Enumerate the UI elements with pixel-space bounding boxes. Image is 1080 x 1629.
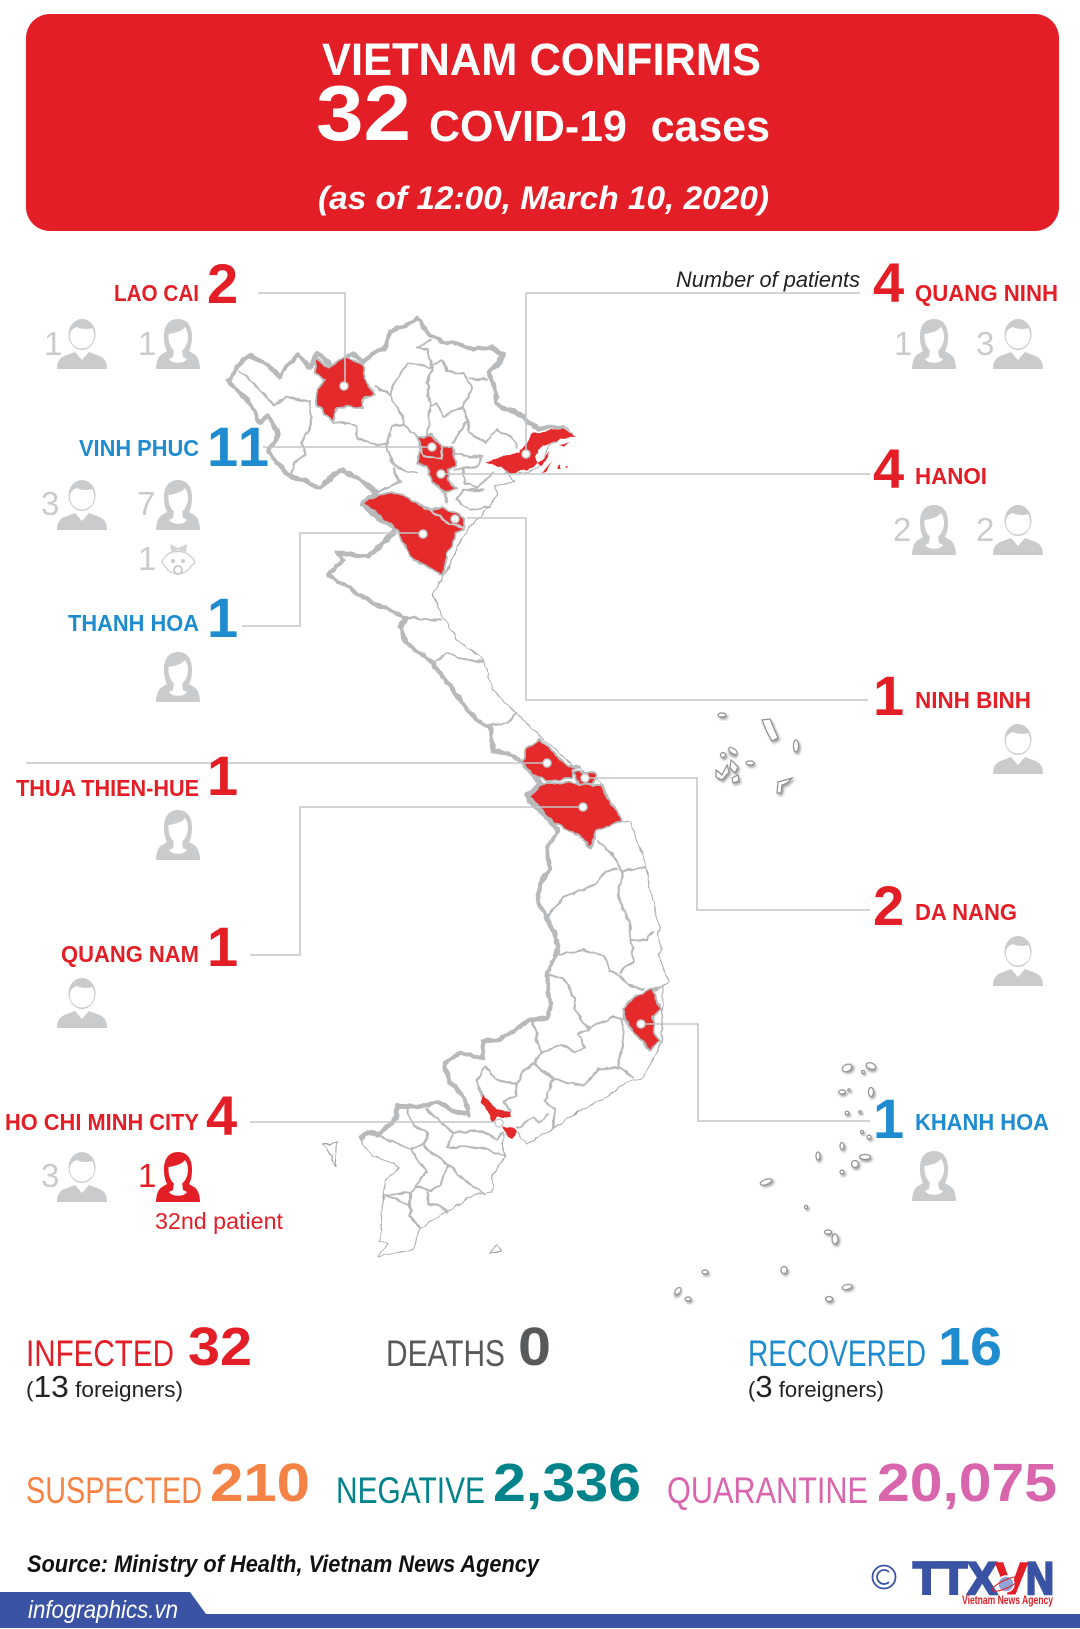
map of Vietnam xyxy=(228,318,669,1257)
islands: Truong Sa xyxy=(674,1061,877,1302)
date line: (as of 12:00, March 10, 2020) xyxy=(318,180,769,216)
location: Lao Cai: LAO CAI xyxy=(114,280,199,306)
site name: infographics.vn xyxy=(28,1596,178,1624)
location: Da Nang: DA NANG xyxy=(915,899,1017,925)
stat: recovered: (3 foreigners) xyxy=(748,1369,884,1404)
location: Ho Chi Minh City: HO CHI MINH CITY xyxy=(5,1109,199,1135)
logo: TTXVN xyxy=(872,1553,1054,1607)
location: Ho Chi Minh City: 3 xyxy=(41,1157,59,1194)
stat: quarantine xyxy=(667,1453,1057,1513)
land border xyxy=(228,318,563,1138)
location: Thanh Hoa: THANH HOA xyxy=(68,610,199,636)
location: Quang Nam: QUANG NAM xyxy=(61,941,199,967)
stat: infected: INFECTED xyxy=(26,1333,174,1374)
location: Hanoi: 2 xyxy=(893,511,911,548)
stat: negative: NEGATIVE xyxy=(336,1470,485,1511)
stat: deaths: 0 xyxy=(518,1317,551,1377)
province: Thanh Hoa and Ninh Binh xyxy=(363,492,465,575)
location: Quang Nam: 1 xyxy=(207,915,238,978)
logo: TTXVN: N xyxy=(1026,1553,1054,1604)
stat: quarantine: 20,075 xyxy=(877,1453,1057,1513)
location: Quang Ninh: 3 xyxy=(976,325,994,362)
location: Hanoi: 4 xyxy=(873,437,904,500)
location: Da Nang xyxy=(873,874,1043,986)
footer bar xyxy=(0,1592,1080,1628)
location: Vinh Phuc xyxy=(41,415,269,577)
location: Lao Cai: 1 xyxy=(44,325,62,362)
location: Ninh Binh: NINH BINH xyxy=(915,687,1031,713)
location: Thanh Hoa xyxy=(68,586,238,702)
location: Quang Ninh xyxy=(873,251,1058,369)
stat: deaths: DEATHS xyxy=(386,1333,505,1374)
location: Ninh Binh xyxy=(873,664,1043,774)
location: Hanoi xyxy=(873,437,1043,555)
location: Khanh Hoa xyxy=(873,1087,1049,1201)
location: Vinh Phuc: 11 xyxy=(207,415,269,478)
location: Ninh Binh: 1 xyxy=(873,664,904,727)
location: Lao Cai xyxy=(44,252,238,369)
location: Khanh Hoa: KHANH HOA xyxy=(915,1109,1049,1135)
location dots xyxy=(340,382,645,1127)
stat: suspected: 210 xyxy=(210,1453,310,1513)
province: Vinh Phuc and Hanoi xyxy=(417,435,457,492)
location: Ho Chi Minh City xyxy=(5,1084,284,1234)
location: Vinh Phuc: 7 xyxy=(137,485,155,522)
location: Thanh Hoa: 1 xyxy=(207,586,238,649)
legend note: Number of patients xyxy=(676,267,860,292)
location: Quang Ninh: 4 xyxy=(873,251,904,314)
province: Lao Cai xyxy=(315,357,375,422)
location: Quang Nam xyxy=(57,915,238,1028)
location: Hanoi: 2 xyxy=(976,511,994,548)
location: Vinh Phuc: VINH PHUC xyxy=(79,435,199,461)
location: Ho Chi Minh City: 4 xyxy=(206,1084,237,1147)
stat: infected: (13 foreigners) xyxy=(26,1369,183,1404)
location: Thua Thien-Hue xyxy=(16,744,238,860)
stat: recovered xyxy=(748,1317,1002,1404)
highlighted provinces xyxy=(315,357,663,1139)
province boundaries xyxy=(240,340,517,725)
logo: TTXVN: V xyxy=(995,1553,1028,1604)
location: Quang Ninh: 1 xyxy=(894,325,912,362)
island: Con Dao xyxy=(490,1245,502,1253)
stat: suspected: SUSPECTED xyxy=(26,1470,202,1511)
province: Khanh Hoa xyxy=(622,985,663,1050)
location: Vinh Phuc: 1 xyxy=(138,540,156,577)
stat: negative: 2,336 xyxy=(493,1453,641,1513)
stat: deaths xyxy=(386,1317,551,1377)
stat: infected: 32 xyxy=(188,1317,252,1377)
title line 2: COVID-19 cases xyxy=(429,102,770,151)
location: Lao Cai: 2 xyxy=(207,252,238,315)
location: Hanoi: HANOI xyxy=(915,463,987,489)
location: Quang Ninh: QUANG NINH xyxy=(915,280,1058,306)
location: Ho Chi Minh City: 1 xyxy=(138,1157,156,1194)
location: Thua Thien-Hue: THUA THIEN-HUE xyxy=(16,775,199,801)
logo: TTXVN: TTX xyxy=(913,1553,997,1604)
header banner xyxy=(26,14,1059,231)
island: Phu Quoc xyxy=(323,1142,337,1167)
province: Quang Ninh xyxy=(485,429,576,473)
location: Thua Thien-Hue: 1 xyxy=(207,744,238,807)
title number: 32 xyxy=(316,69,411,157)
location: Khanh Hoa: 1 xyxy=(873,1087,904,1150)
country fill and coast xyxy=(228,318,669,1257)
stat: recovered: 16 xyxy=(938,1317,1002,1377)
location: Lao Cai: 1 xyxy=(138,325,156,362)
province: Quang Nam xyxy=(530,783,623,848)
location: Da Nang: 2 xyxy=(873,874,904,937)
note: 32nd patient: 32nd patient xyxy=(155,1208,284,1234)
source line: Source: Ministry of Health, Vietnam News Agency xyxy=(27,1551,540,1578)
islands: Hoang Sa xyxy=(716,713,798,793)
location: Vinh Phuc: 3 xyxy=(41,485,59,522)
province: Da Nang xyxy=(573,772,597,784)
title line 1: VIETNAM CONFIRMS xyxy=(322,34,761,85)
stat: quarantine: QUARANTINE xyxy=(667,1470,868,1511)
province: Ho Chi Minh City xyxy=(480,1095,517,1139)
province: Thua Thien-Hue xyxy=(522,739,580,781)
stat: recovered: RECOVERED xyxy=(748,1333,926,1374)
stat: infected xyxy=(26,1317,252,1404)
leader lines xyxy=(26,293,870,1127)
icon: baby xyxy=(162,544,195,574)
stat: suspected xyxy=(26,1453,310,1513)
stat: negative xyxy=(336,1453,641,1513)
copyright mark xyxy=(872,1566,896,1588)
